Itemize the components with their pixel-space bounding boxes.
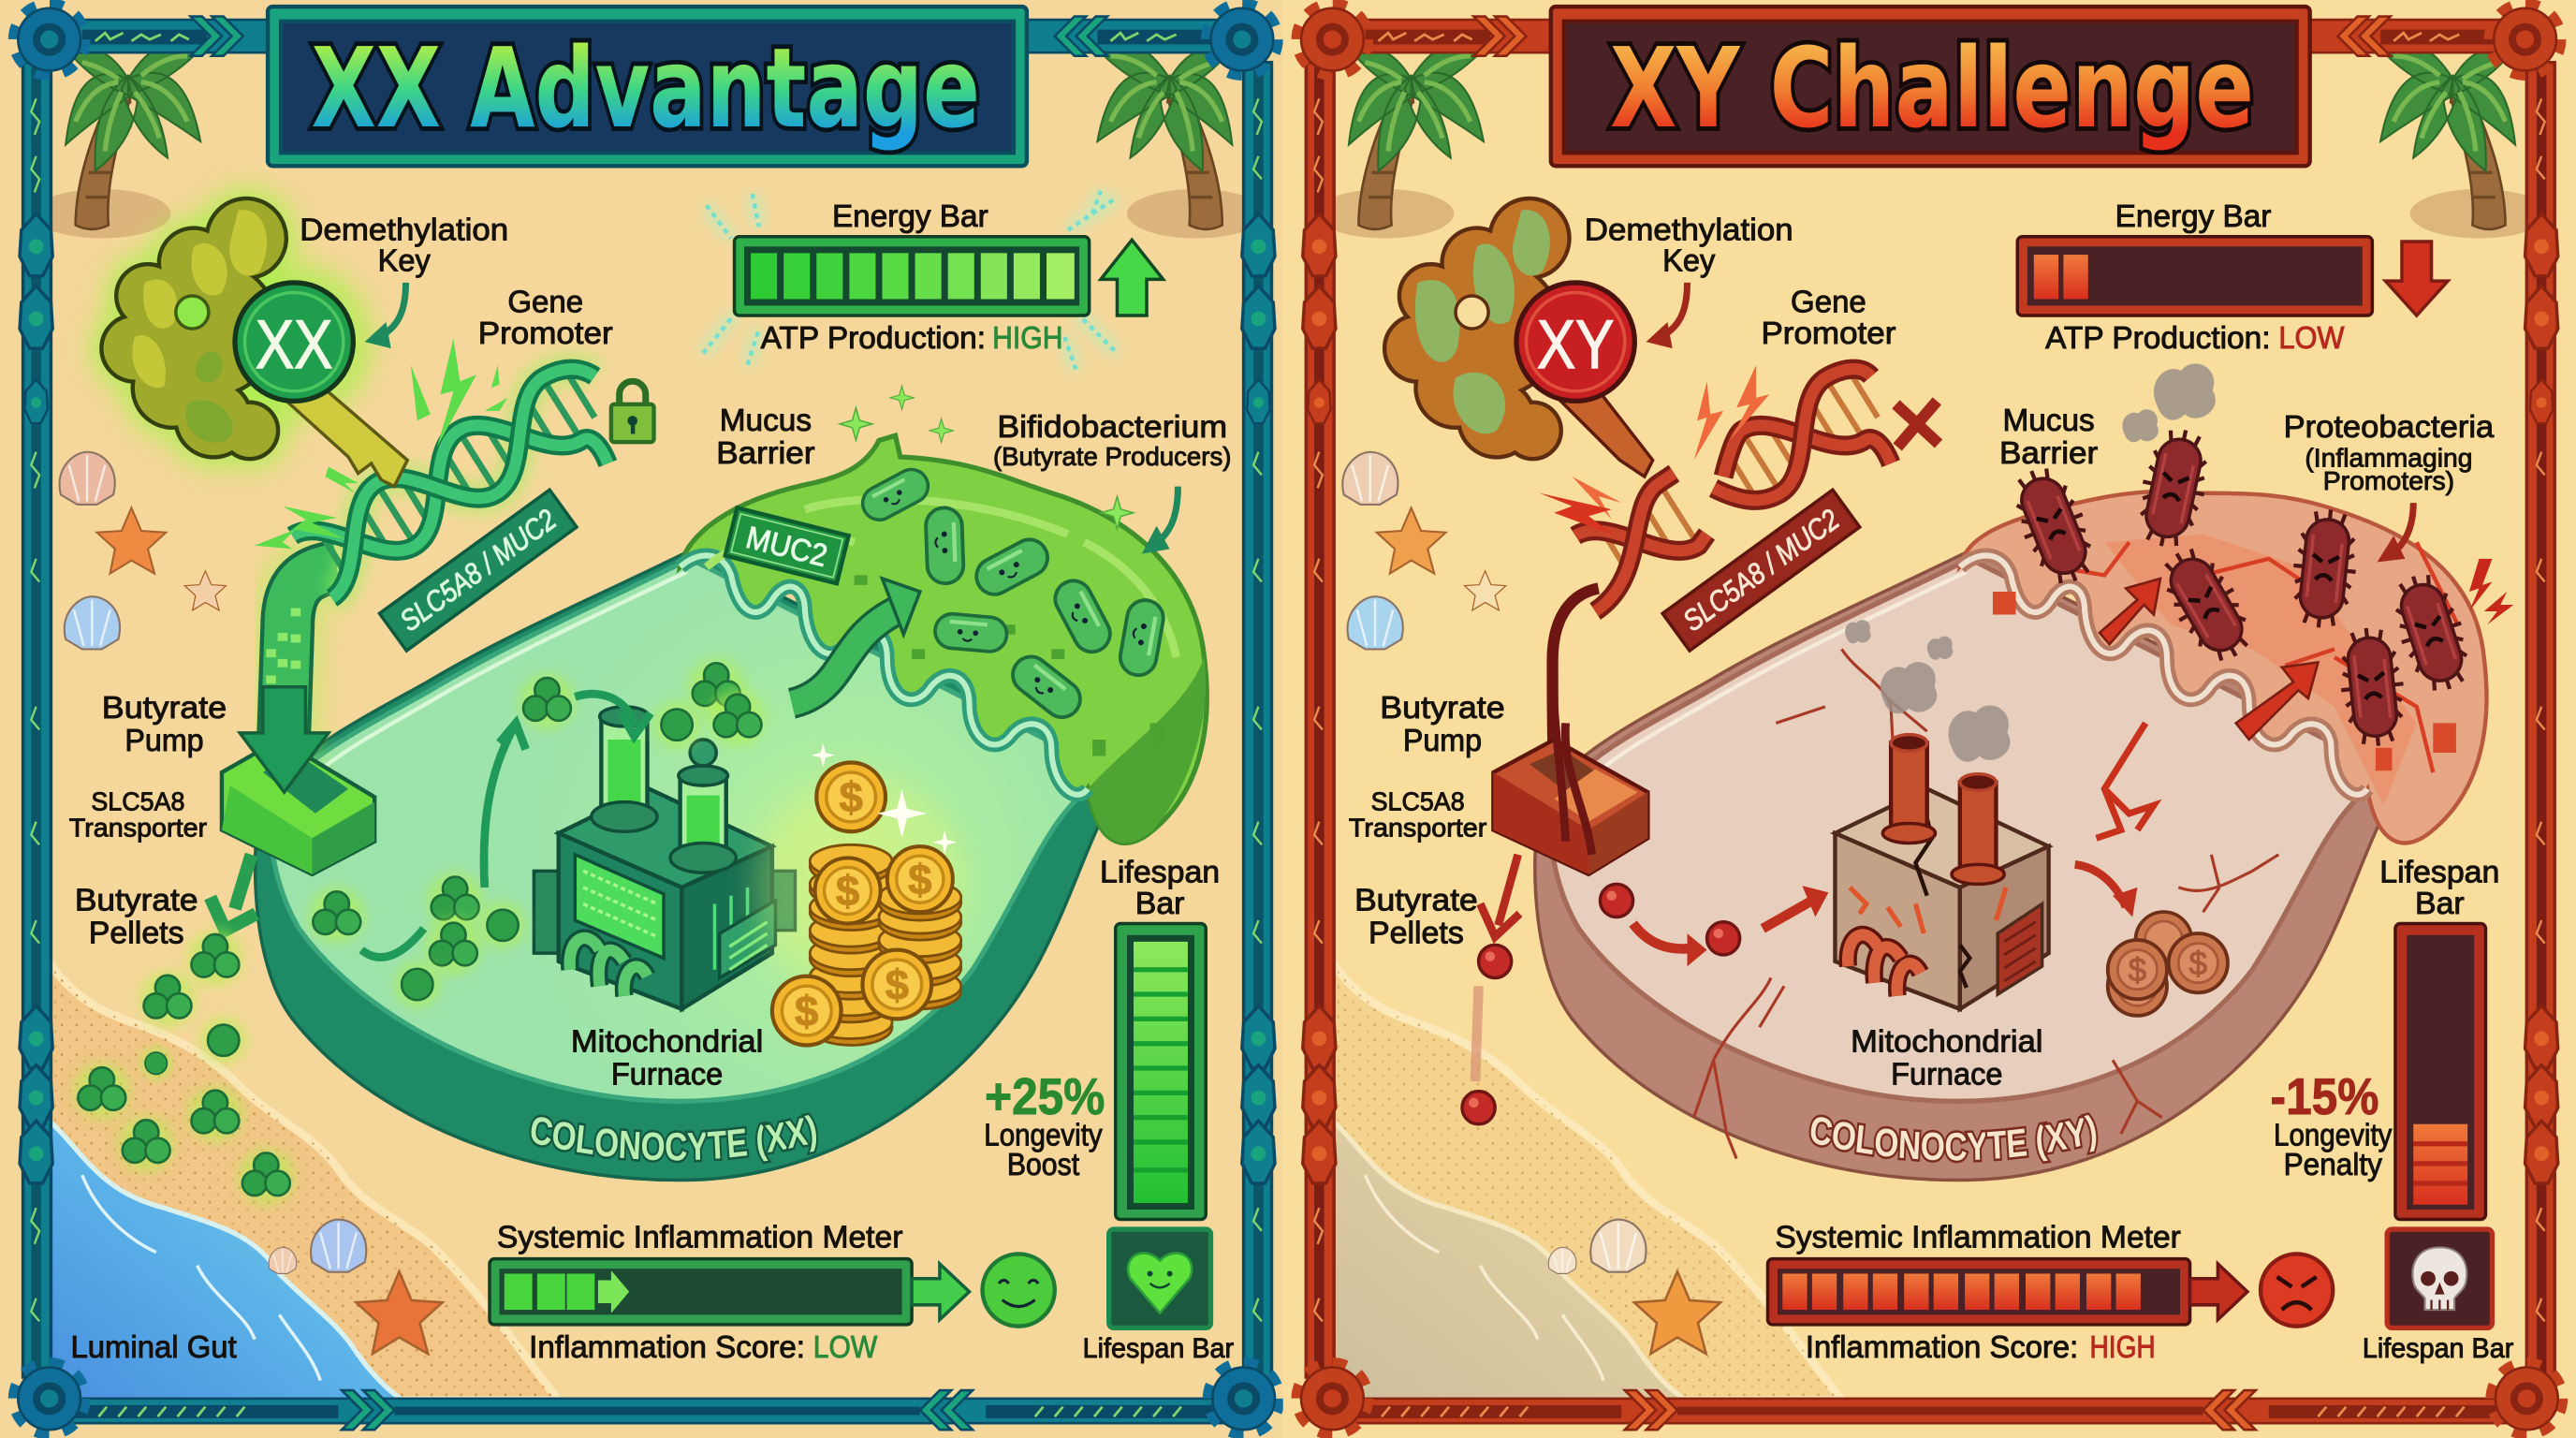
lifespan bar [1116,924,1206,1220]
label: lifespan bar vertical [2379,856,2499,921]
label: demethylation key: Demethylation [300,213,508,247]
gold coins [754,742,971,1045]
label: butyrate pump [102,691,227,758]
arrow: proteobacteria label [2378,503,2413,562]
frame border [15,5,1278,1433]
gene label tag: SLC5A8 / MUC2: SLC5A8 / MUC2 [1676,502,1846,638]
lifespan bar [2395,924,2485,1220]
label: SLC5A8 transporter [1349,786,1486,843]
arrow: butyrate production into cell [792,579,920,703]
demethylation key [104,200,407,487]
label: energy bar: Energy Bar [832,199,988,234]
lightning bolts [255,339,507,549]
label: mucus barrier [1999,404,2098,471]
sand background [0,0,1283,1438]
wet sand shoreline [41,948,559,1401]
stat: -15% longevity penalty: Penalty [2284,1148,2382,1182]
panel: XY Challenge [1282,0,2569,1438]
inflammation meter [1767,1259,2247,1325]
label: lifespan bar vertical: Bar [2415,887,2465,921]
label: gene promoter: Promoter [478,316,613,351]
label: gene promoter [478,286,613,351]
label: SLC5A8 transporter: SLC5A8 [1371,786,1465,815]
icon: angry face [2261,1254,2333,1327]
stat: +25% longevity boost [984,1068,1105,1182]
label: mitochondrial furnace: Furnace [1891,1058,2002,1093]
sign: MUC2 [725,507,849,583]
label: colonocyte: COLONOCYTE (XX) [530,1112,818,1165]
label: mucus barrier: Barrier [716,436,815,471]
label: proteobacteria: Promoters) [2323,466,2454,495]
label: mitochondrial furnace: Furnace [611,1058,723,1093]
icon: padlock [611,381,654,442]
stat: +25% longevity boost: +25% [985,1068,1105,1125]
label: systemic inflammation meter: Systemic Inflammation Meter [1775,1220,2181,1255]
red zap near bacteria [2469,559,2513,624]
stat: +25% longevity boost: Boost [1007,1148,1080,1182]
label: ATP production low: ATP Production: [2045,321,2271,356]
mucus barrier [681,435,1207,843]
energy bar [703,191,1164,370]
butyrate pump [1493,661,1647,874]
label: bifidobacterium: (Butyrate Producers) [993,442,1231,471]
copper coins: $ [2129,952,2146,989]
inflammation meter [490,1259,970,1325]
label: mitochondrial furnace: Mitochondrial [1851,1024,2042,1059]
frame border [1298,5,2561,1433]
mucus sparkles [840,386,1134,529]
label: inflammation score low: Inflammation Score: [529,1330,805,1365]
label: luminal gut: Luminal Gut [70,1330,237,1365]
beach shells and starfish [60,452,443,1354]
label: lifespan bar vertical: Bar [1135,887,1184,921]
label: butyrate pellets [75,884,198,951]
label: mitochondrial furnace: Mitochondrial [571,1024,763,1059]
dried water [1332,1121,1686,1401]
wet sand shoreline [1325,948,1841,1401]
stat: -15% longevity penalty [2271,1068,2393,1182]
title banner: XY Challenge [1551,7,2310,166]
label: systemic inflammation meter: Systemic Inflammation Meter [497,1220,902,1255]
stat: -15% longevity penalty: Longevity [2274,1119,2393,1153]
label: mitochondrial furnace [1851,1024,2042,1093]
icon: heart lifespan [1109,1229,1211,1328]
icon: happy face [983,1254,1055,1327]
butyrate pump [222,687,374,874]
arrows: toxins invade [2100,579,2318,740]
smoke [1845,363,2216,762]
demethylation key broken: XY [1537,305,1614,383]
broken DNA helix [1575,369,1891,611]
label: butyrate pellets [1354,884,1478,951]
label: lifespan bar bottom: Lifespan Bar [1083,1333,1234,1364]
gold coins: $ [908,856,932,903]
label: lifespan bar vertical [1100,856,1220,921]
label: demethylation key: Key [378,244,431,279]
label: mucus barrier [716,404,815,471]
arrowheads [1687,886,1828,966]
label: inflammation score high: Inflammation Score: [1806,1330,2078,1365]
label: gene promoter: Gene [1791,286,1866,320]
label: lifespan bar bottom: Lifespan Bar [2363,1333,2513,1364]
icon: skull [2387,1229,2492,1328]
proteobacteria [2002,424,2480,749]
label: ATP production high: HIGH [992,321,1063,356]
label: mitochondrial furnace [571,1024,763,1093]
arrow: bifidobacterium label [1142,487,1178,554]
demethylation key: XX [256,305,332,383]
arrow: pump to lumen [1480,855,1519,937]
sand background [1283,0,2576,1438]
beach shells and starfish [1342,452,1720,1354]
gold coins: $ [886,961,909,1008]
energy bar [2017,237,2448,315]
label: colonocyte: COLONOCYTE (XY) [1808,1112,2099,1165]
label: proteobacteria: Proteobacteria [2284,410,2495,445]
title banner: XX Advantage [268,7,1027,166]
broken furnace [1835,735,2049,1009]
icon: red X [1895,401,1939,447]
label: demethylation key: Demethylation [1585,213,1793,247]
water: luminal gut [50,1121,402,1401]
label: SLC5A8 transporter [69,786,207,843]
title banner: XX Advantage: XX Advantage [312,24,980,153]
label: bifidobacterium: Bifidobacterium [997,410,1227,445]
label: gene promoter [1761,286,1895,351]
label: butyrate pellets: Pellets [1368,917,1464,951]
gold coins: $ [795,987,818,1034]
label: lifespan bar vertical: Lifespan [1100,856,1220,890]
arrow: pump to lumen [211,855,256,931]
label: butyrate pump: Pump [124,724,204,758]
label: mucus barrier: Mucus [720,404,812,438]
arrow: weak output to coins [2075,864,2137,917]
label: SLC5A8 transporter: Transporter [1349,814,1486,843]
sign: MUC2: MUC2 [742,521,830,574]
arrows: weak butyrate flow [1633,901,1812,949]
colonocyte cell [1498,513,2451,1181]
label: ATP production high: ATP Production: [761,321,986,356]
label: gene promoter: Promoter [1761,316,1895,351]
arrow: key label [1647,283,1687,348]
label: butyrate pellets: Butyrate [1354,884,1478,918]
butyrate pellets [1462,884,1740,1124]
label: proteobacteria [2284,410,2495,495]
label: demethylation key: Key [1662,244,1716,279]
copper coins: $ [2189,946,2207,982]
palm trees [33,44,1265,239]
damaged mucus barrier [1960,492,2486,843]
label: butyrate pump [1380,691,1505,758]
gene label tag: SLC5A8 / MUC2: SLC5A8 / MUC2 [393,502,563,638]
label: butyrate pump: Butyrate [1380,691,1505,726]
tube: thin red channel [1553,588,1599,838]
label: bifidobacterium [993,410,1231,471]
label: mucus barrier: Barrier [1999,436,2098,471]
DNA helix [292,369,607,598]
arrow: key label [365,283,406,348]
arrows: butyrate flow inside cell [361,694,651,957]
bifidobacterium colony [856,463,1166,725]
label: butyrate pellets: Butyrate [75,884,198,918]
mitochondrial furnace [534,707,795,1009]
lightning bolts [1540,365,1769,536]
colonocyte cell [223,513,1171,1193]
gold coins: $ [836,867,859,915]
label: demethylation key [300,213,508,279]
label: demethylation key [1585,213,1793,279]
label: lifespan bar vertical: Lifespan [2379,856,2499,890]
stat: -15% longevity penalty: -15% [2271,1068,2378,1125]
label: mucus barrier: Mucus [2002,404,2095,438]
label: butyrate pump: Butyrate [102,691,227,726]
tube: glowing channel [271,567,337,772]
panel: XX Advantage [7,0,1283,1438]
title banner: XY Challenge: XY Challenge [1610,24,2254,153]
copper coins [2108,912,2228,1016]
gold coins: $ [839,773,863,821]
butyrate pellets [74,659,766,1205]
label: ATP production low: LOW [2278,321,2345,356]
label: SLC5A8 transporter: Transporter [69,814,207,843]
label: inflammation score low: LOW [813,1330,878,1365]
label: proteobacteria: (Inflammaging [2305,444,2472,473]
demethylation key broken [1386,200,1653,477]
label: butyrate pellets: Pellets [89,917,184,951]
label: inflammation score high: HIGH [2089,1330,2156,1365]
label: energy bar: Energy Bar [2115,199,2271,234]
label: SLC5A8 transporter: SLC5A8 [91,786,184,815]
stat: +25% longevity boost: Longevity [984,1119,1103,1153]
cell cracks [1694,649,2278,1159]
label: butyrate pump: Pump [1403,724,1482,758]
label: gene promoter: Gene [507,286,583,320]
palm trees [1316,44,2548,239]
